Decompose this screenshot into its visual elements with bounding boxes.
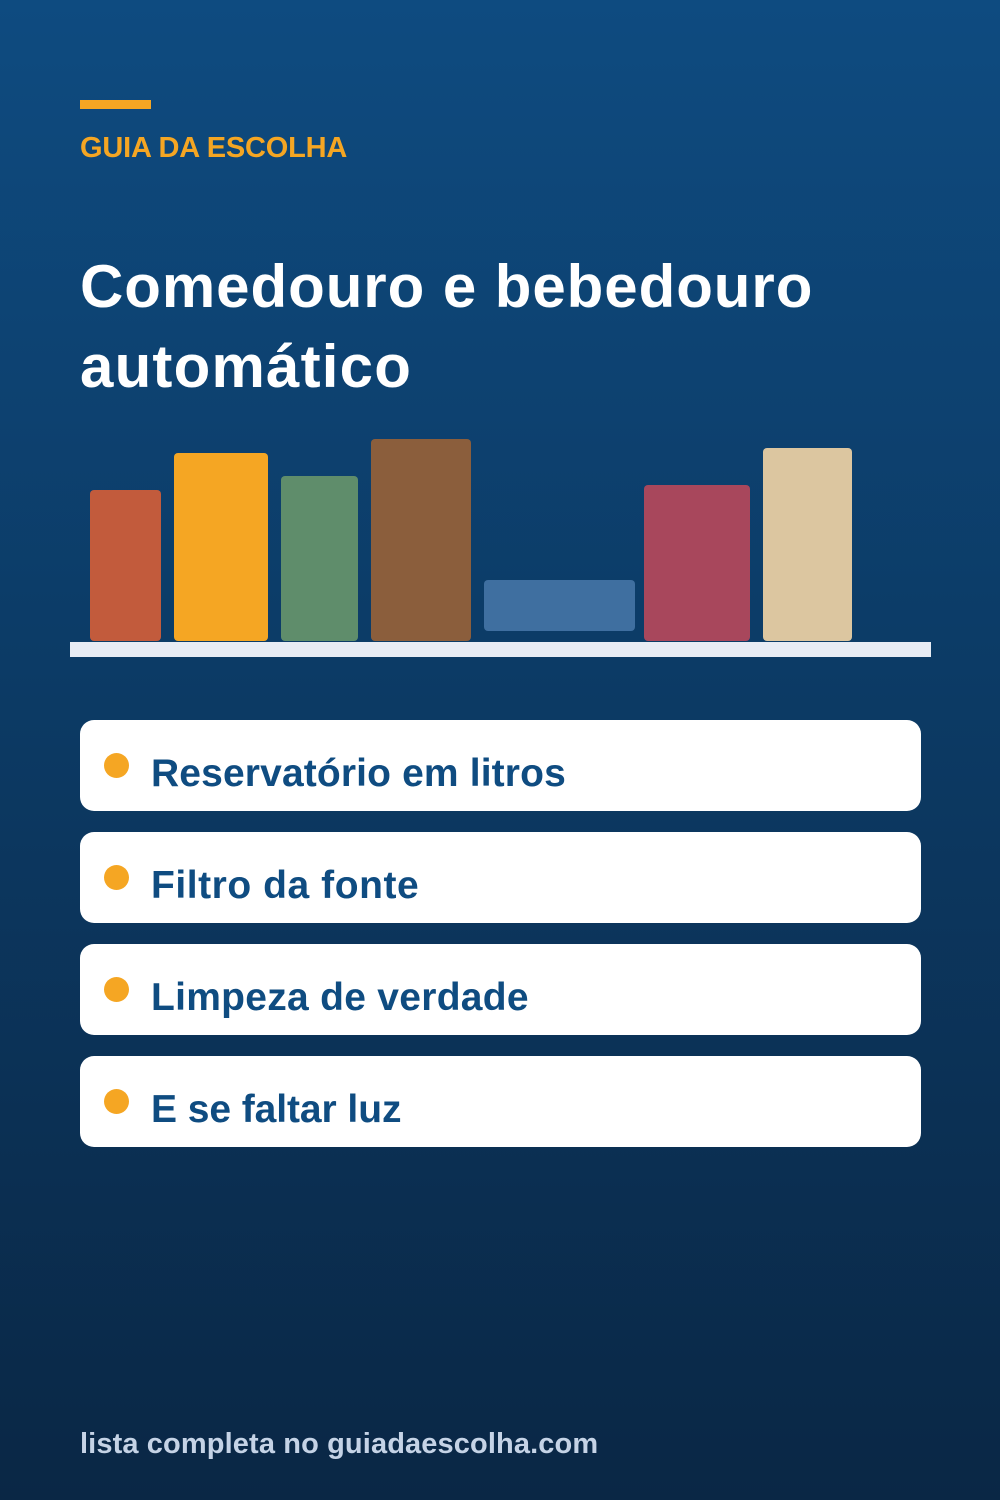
bullet [104,977,129,1002]
bookshelf chart [70,439,931,657]
label: Reservatório em litros [151,752,566,795]
bullet [104,753,129,778]
book: tan [763,448,852,641]
book: maroon [644,485,750,641]
book: brown [371,439,471,641]
label: Filtro da fonte [151,864,419,907]
card: E se faltar luz [80,1056,921,1147]
eyebrow label: GUIA DA ESCOLHA [80,132,347,164]
book: blue, lying flat [484,580,635,631]
label: E se faltar luz [151,1088,401,1131]
book: red [90,490,161,641]
shelf [70,642,931,657]
book: yellow [174,453,268,641]
card: Limpeza de verdade [80,944,921,1035]
card: Reservatório em litros [80,720,921,811]
label: Limpeza de verdade [151,976,529,1019]
title [80,253,813,400]
card: Filtro da fonte [80,832,921,923]
bullet [104,1089,129,1114]
book: green [281,476,358,641]
footer: lista completa no guiadaescolha.com [80,1428,598,1460]
title: automático [80,333,412,400]
title: Comedouro e bebedouro [80,253,813,320]
accent bar [80,100,151,109]
bullet [104,865,129,890]
